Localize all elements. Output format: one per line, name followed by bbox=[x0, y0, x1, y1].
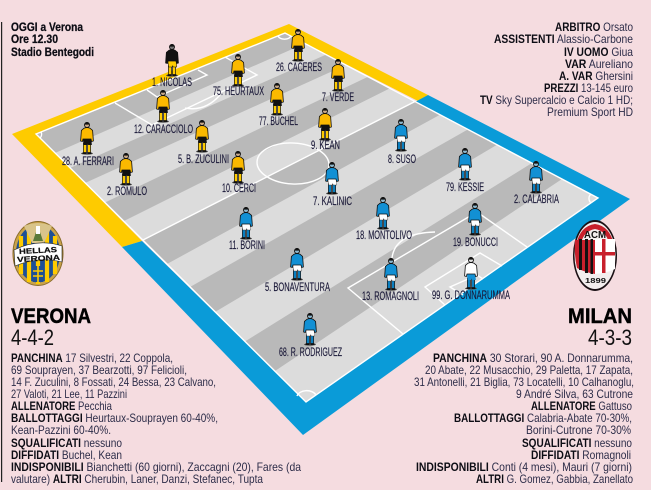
text block: Verona squad notes: INDISPONIBILI Bianchetti (60 giorni), Zaccagni (20), Fares (da bbox=[11, 460, 301, 474]
text block: Verona squad notes: 14 F. Zuculini, 8 Fossati, 24 Bessa, 23 Calvano, bbox=[11, 375, 216, 389]
player: 5. Bonaventura bbox=[265, 248, 330, 294]
player: 18. Montolivo: 18. MONTOLIVO bbox=[356, 228, 412, 242]
player: 10. Cerci: 10. CERCI bbox=[222, 181, 256, 195]
text block: Verona squad notes: 69 Souprayen, 37 Bearzotti, 97 Felicioli, bbox=[11, 363, 187, 377]
player: 99. G. Donnarumma bbox=[432, 257, 510, 302]
player: 68. R. Rodriguez: 68. R. RODRIGUEZ bbox=[279, 345, 342, 359]
officials and broadcast info: ARBITRO Orsato bbox=[555, 20, 633, 34]
match info bbox=[11, 20, 94, 59]
player: 75. Heurtaux bbox=[213, 54, 264, 98]
officials and broadcast info: IV UOMO Giua bbox=[564, 45, 633, 59]
player: 26. Caceres bbox=[276, 29, 322, 74]
player: 2. Romulo: 2. ROMULO bbox=[107, 184, 147, 198]
text block: Milan squad notes: DIFFIDATI Romagnoli bbox=[531, 448, 631, 462]
officials and broadcast info: VAR Aureliano bbox=[565, 57, 633, 71]
text block: Verona squad notes: valutare) ALTRI Cherubin, Laner, Danzi, Stefanec, Tupta bbox=[11, 472, 263, 486]
officials and broadcast info: ASSISTENTI Alassio-Carbone bbox=[494, 32, 633, 46]
player: 7. Verde bbox=[322, 59, 354, 104]
text block: Milan squad notes: ALLENATORE Gattuso bbox=[531, 399, 632, 413]
player: 7. Verde: 7. VERDE bbox=[322, 90, 354, 104]
pitch surface bbox=[36, 33, 598, 402]
icon: Hellas Verona crest: HELLAS bbox=[19, 245, 57, 256]
player: 7. Kalinic: 7. KALINIC bbox=[313, 194, 352, 208]
player: 77. Buchel: 77. BUCHEL bbox=[259, 114, 298, 128]
icon: Hellas Verona crest: VERONA bbox=[17, 253, 61, 264]
player: 1. Nicolas bbox=[152, 44, 192, 89]
player: 8. Suso bbox=[388, 119, 416, 166]
text block: Verona squad notes: 27 Valoti, 21 Lee, 11 Pazzini bbox=[11, 387, 127, 401]
player: 68. R. Rodriguez bbox=[279, 313, 342, 359]
text block: Milan squad notes: SQUALIFICATI nessuno bbox=[522, 436, 632, 450]
text block: Verona squad notes: DIFFIDATI Buchel, Kean bbox=[11, 448, 122, 462]
icon: Hellas Verona crest bbox=[13, 222, 63, 286]
text block: Verona squad notes: Kean-Pazzini 60-40%. bbox=[11, 423, 111, 437]
player: 11. Borini: 11. BORINI bbox=[229, 238, 265, 252]
match info: Stadio Bentegodi bbox=[11, 45, 94, 59]
heading: Verona: VERONA bbox=[11, 304, 91, 328]
pitch markings bbox=[36, 33, 598, 402]
text block: Verona squad notes bbox=[11, 351, 301, 486]
player: 28. A. Ferrari bbox=[62, 122, 114, 168]
text block: Milan squad notes bbox=[414, 351, 634, 486]
player: 11. Borini bbox=[229, 207, 265, 252]
player: 19. Bonucci: 19. BONUCCI bbox=[453, 235, 498, 249]
player: 13. Romagnoli: 13. ROMAGNOLI bbox=[362, 289, 419, 303]
yellow border: Verona half bbox=[12, 24, 428, 247]
heading: Milan: 4-3-3 bbox=[588, 325, 632, 350]
player: 19. Bonucci bbox=[453, 203, 498, 249]
text block: Verona squad notes: SQUALIFICATI nessuno bbox=[11, 436, 122, 450]
player: 2. Calabria bbox=[514, 161, 559, 206]
panel: pitch bbox=[12, 24, 630, 435]
player: 5. Bonaventura: 5. BONAVENTURA bbox=[265, 280, 330, 294]
player: 77. Buchel bbox=[259, 83, 298, 128]
player: 2. Calabria: 2. CALABRIA bbox=[514, 192, 559, 206]
blue border: Milan half bbox=[122, 95, 630, 435]
icon: AC Milan crest: ACM bbox=[584, 229, 606, 241]
text block: Verona squad notes: ALLENATORE Pecchia bbox=[11, 399, 112, 413]
player: 9. Kean bbox=[311, 108, 340, 152]
player: 12. Caracciolo bbox=[134, 90, 193, 136]
text block: Milan squad notes: BALLOTTAGGI Calabria-Abate 70-30%, bbox=[454, 411, 632, 425]
left rule bbox=[1, 22, 2, 482]
player: 79. Kessie: 79. KESSIE bbox=[446, 180, 484, 194]
heading: Verona bbox=[11, 304, 91, 350]
heading: Milan: MILAN bbox=[568, 304, 632, 328]
icon: AC Milan crest bbox=[573, 220, 617, 291]
officials and broadcast info bbox=[480, 20, 633, 119]
text block: Milan squad notes: 9 André Silva, 63 Cutrone bbox=[516, 387, 633, 401]
officials and broadcast info: PREZZI 13-145 euro bbox=[544, 81, 633, 95]
icon: AC Milan crest: 1899 bbox=[585, 276, 606, 285]
player: 1. Nicolas: 1. NICOLAS bbox=[152, 75, 192, 89]
player: 5. B. Zuculini: 5. B. ZUCULINI bbox=[178, 152, 229, 166]
text block: Milan squad notes: Borini-Cutrone 70-30% bbox=[526, 423, 631, 437]
player: 8. Suso: 8. SUSO bbox=[388, 152, 416, 166]
officials and broadcast info: A. VAR Ghersini bbox=[559, 69, 633, 83]
heading: Verona: 4-4-2 bbox=[11, 325, 54, 350]
player: 18. Montolivo bbox=[356, 197, 412, 242]
heading: Milan bbox=[568, 304, 632, 350]
officials and broadcast info: Premium Sport HD bbox=[547, 105, 633, 119]
mown stripes bbox=[36, 33, 562, 371]
player: 2. Romulo bbox=[107, 153, 147, 198]
text block: Milan squad notes: PANCHINA 30 Storari, 90 A. Donnarumma, bbox=[433, 351, 633, 365]
text block: Milan squad notes: INDISPONIBILI Conti (4 mesi), Mauri (7 giorni) bbox=[416, 460, 632, 474]
player: 79. Kessie bbox=[446, 148, 484, 194]
player: 13. Romagnoli bbox=[362, 258, 419, 303]
player: 10. Cerci bbox=[222, 151, 256, 195]
player: 12. Caracciolo: 12. CARACCIOLO bbox=[134, 122, 193, 136]
player: 75. Heurtaux: 75. HEURTAUX bbox=[213, 84, 264, 98]
player: 5. B. Zuculini bbox=[178, 120, 229, 166]
player: 99. G. Donnarumma: 99. G. DONNARUMMA bbox=[432, 288, 510, 302]
text block: Verona squad notes: PANCHINA 17 Silvestri, 22 Coppola, bbox=[11, 351, 173, 365]
player: 26. Caceres: 26. CACERES bbox=[276, 60, 322, 74]
player: 7. Kalinic bbox=[313, 162, 352, 208]
match info: OGGI a Verona bbox=[11, 20, 83, 34]
match info: Ore 12.30 bbox=[11, 32, 58, 46]
player: 9. Kean: 9. KEAN bbox=[311, 138, 340, 152]
text block: Verona squad notes: BALLOTTAGGI Heurtaux-Souprayen 60-40%, bbox=[11, 411, 218, 425]
player: 28. A. Ferrari: 28. A. FERRARI bbox=[62, 154, 114, 168]
